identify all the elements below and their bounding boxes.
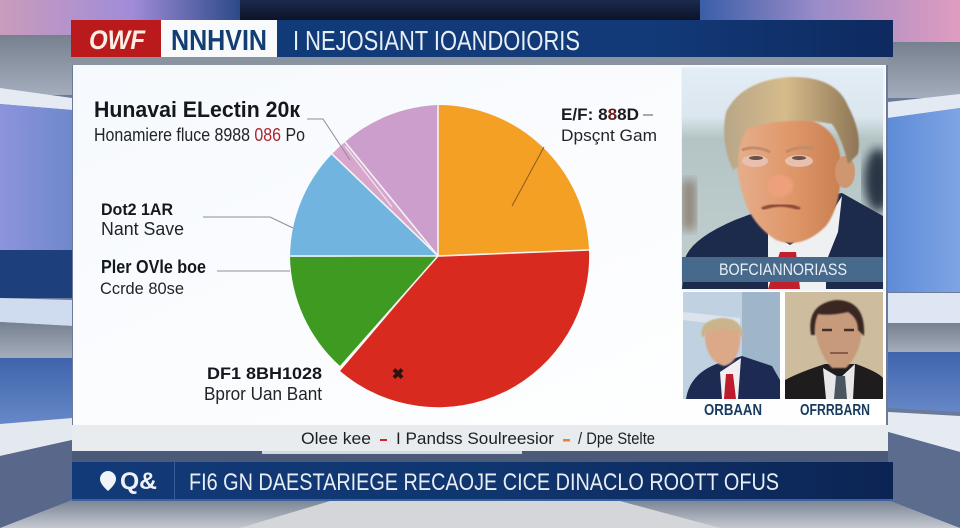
bottom ticker bbox=[72, 462, 893, 501]
main white panel bbox=[72, 57, 888, 427]
left small photo bbox=[683, 292, 780, 399]
ticker section label: Q& bbox=[120, 468, 157, 495]
label: bottom left: Bpror Uan Bant bbox=[204, 384, 322, 404]
label: middle left 2 bbox=[100, 257, 290, 298]
suit bbox=[682, 193, 883, 289]
legend strip: / Dpe Stelte bbox=[578, 429, 655, 448]
main photo panel bbox=[681, 66, 892, 291]
small photo captions: OFRRBARN bbox=[800, 402, 870, 419]
ticker headline: FI6 GN DAESTARIEGE RECAOJE CICE DINACLO ROOTT OFUS bbox=[189, 469, 779, 496]
channel name block: NNHVIN bbox=[171, 25, 267, 57]
pie chart bbox=[290, 105, 589, 407]
eyes bbox=[742, 155, 768, 167]
label: top right: E/F: 888D bbox=[561, 105, 639, 124]
legend strip: I Pandss Soulreesior bbox=[396, 429, 554, 448]
ear bbox=[835, 156, 855, 188]
label: middle left 1 bbox=[101, 200, 293, 239]
top title bar bbox=[71, 20, 893, 57]
small photo captions bbox=[704, 402, 870, 419]
marker on red slice: ✖ bbox=[392, 366, 404, 383]
main photo caption: BOFCIANNORIASS bbox=[719, 260, 847, 279]
label: middle left 1: Nant Save bbox=[101, 219, 184, 239]
label: top left: Honamiere fluce 8988 086 Po bbox=[94, 125, 305, 145]
logo block bbox=[71, 20, 161, 57]
hair bbox=[724, 77, 859, 170]
label: top right: Dpsçnt Gam bbox=[561, 126, 657, 145]
headline block: I NEJOSIANT IOANDOIORIS bbox=[293, 25, 580, 56]
label: top right bbox=[561, 105, 657, 145]
label: bottom left: DF1 8BH1028 bbox=[207, 364, 322, 383]
label: bottom left bbox=[204, 364, 322, 404]
small photo captions: ORBAAN bbox=[704, 402, 762, 419]
label: middle left 2: Ccrde 80se bbox=[100, 279, 184, 298]
label: top left: Hunavai ELectin 20к bbox=[94, 97, 301, 122]
label: middle left 1: Dot2 1AR bbox=[101, 200, 173, 219]
legend strip bbox=[72, 425, 888, 454]
logo block: OWF bbox=[89, 25, 146, 55]
right small photo bbox=[785, 292, 883, 399]
face bbox=[735, 116, 841, 243]
headline block bbox=[277, 20, 893, 57]
shirt bbox=[768, 196, 842, 289]
icon: location pin bbox=[100, 471, 116, 491]
legend strip: Olee kee bbox=[301, 429, 371, 448]
label: top left bbox=[94, 97, 392, 207]
label: middle left 2: Pler OVle boe bbox=[101, 257, 206, 277]
main photo caption bbox=[682, 257, 883, 282]
